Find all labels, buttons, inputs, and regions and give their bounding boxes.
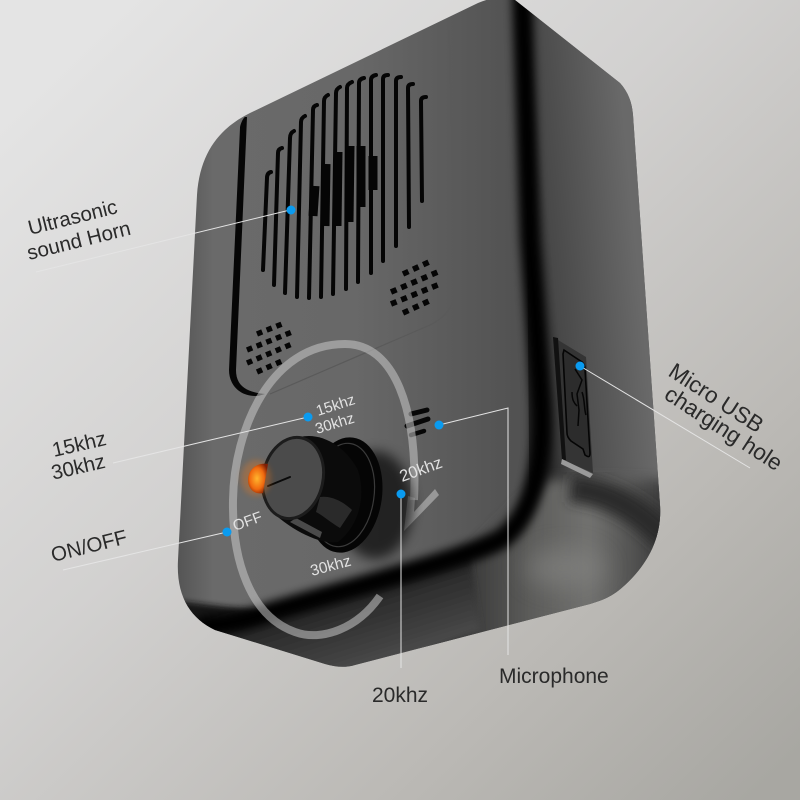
leader: ultrasonic horn bbox=[36, 206, 296, 272]
leader: microphone bbox=[434, 408, 508, 655]
speaker cone behind the grille bbox=[313, 146, 373, 226]
dial labels: OFF bbox=[231, 509, 265, 535]
dial labels bbox=[231, 391, 445, 580]
label: 20khz: 20khz bbox=[372, 684, 428, 707]
label: 15khz 30khz: 30khz bbox=[49, 450, 108, 485]
leader: 15khz 30khz bbox=[113, 412, 312, 463]
USB port bbox=[553, 337, 593, 478]
knob base ring bbox=[300, 432, 390, 558]
label: on off: ON/OFF bbox=[49, 526, 129, 567]
leader: micro usb bbox=[576, 362, 750, 468]
knob shadow bbox=[337, 451, 413, 559]
device body bbox=[178, 0, 660, 667]
knob body bbox=[268, 436, 361, 542]
label: micro usb charging hole: charging hole bbox=[660, 381, 787, 476]
dial labels: 30khz bbox=[309, 553, 353, 580]
speaker panel outline bbox=[229, 117, 265, 396]
label: 15khz 30khz: 15khz bbox=[50, 427, 108, 462]
rotary knob bbox=[255, 432, 413, 559]
vent grid left bbox=[247, 324, 292, 372]
vent grid right bbox=[391, 262, 440, 313]
label: microphone: Microphone bbox=[499, 665, 609, 688]
dial labels: 20khz bbox=[397, 454, 445, 486]
rotation arc with arrow bbox=[233, 344, 439, 635]
LED indicator bbox=[241, 460, 271, 496]
label: ultrasonic sound horn: Ultrasonic bbox=[26, 195, 120, 240]
label: micro usb charging hole: Micro USB bbox=[664, 358, 768, 438]
USB symbol bbox=[572, 369, 586, 426]
knob top bbox=[255, 432, 331, 524]
knob pointer bbox=[268, 477, 290, 486]
leader: on off bbox=[63, 528, 232, 570]
dark groove around front face bbox=[205, 0, 542, 626]
device side and lower shading bbox=[184, 0, 660, 667]
knob highlights bbox=[316, 497, 352, 528]
device silhouette bbox=[178, 0, 660, 667]
panel line inside clip bbox=[270, 337, 401, 394]
lower left wall bbox=[184, 562, 477, 667]
leader: 20khz bbox=[396, 490, 406, 668]
speaker grille bbox=[263, 75, 426, 298]
dial labels: 30khz bbox=[313, 410, 356, 438]
dial labels: 15khz bbox=[314, 391, 357, 420]
microphone holes bbox=[407, 410, 428, 435]
label: ultrasonic sound horn: sound Horn bbox=[25, 217, 133, 265]
lower right wall bbox=[425, 474, 660, 647]
